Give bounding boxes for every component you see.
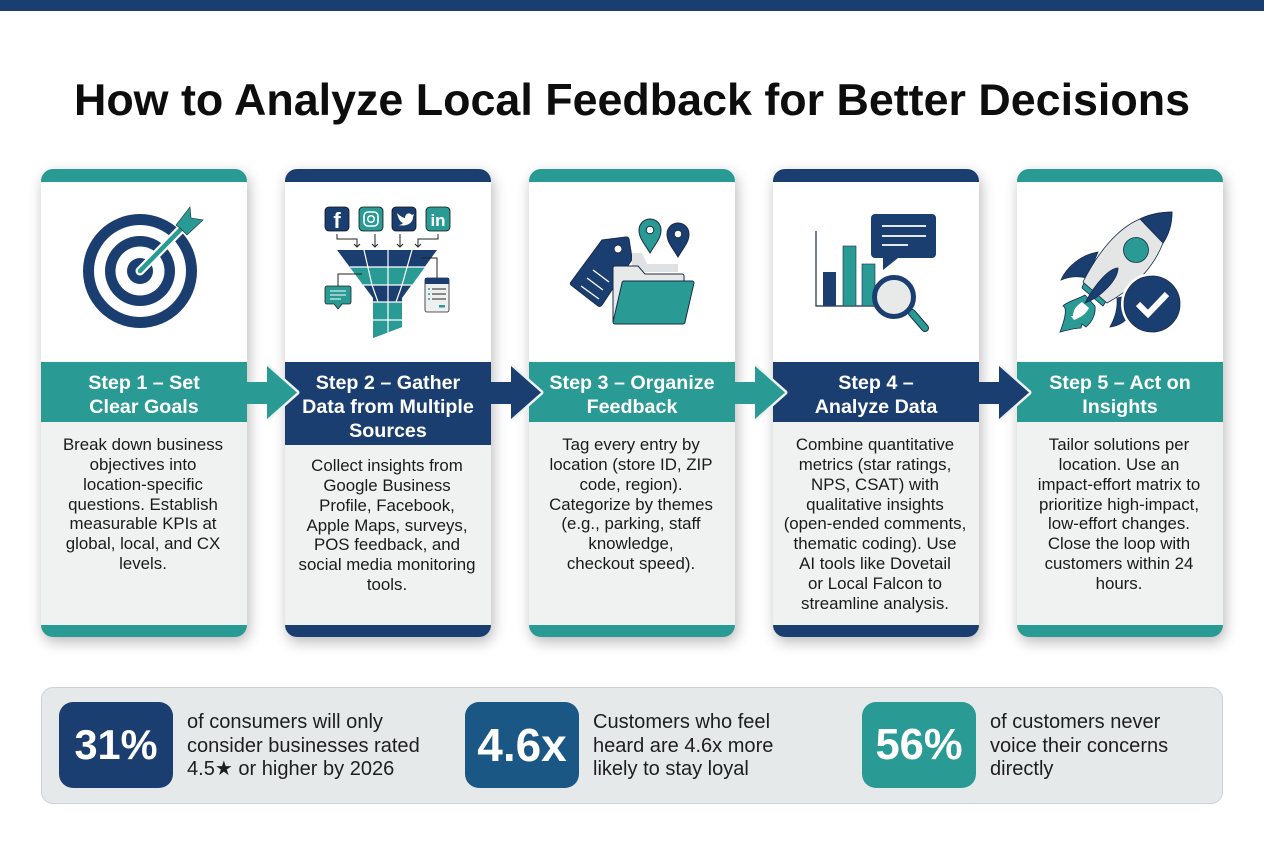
text: step 2: social media monitoring [299,555,475,574]
heading: step 3 [529,362,735,422]
stat text: 31%: of consumers will only [187,711,383,733]
panel: step 5 card [1017,169,1223,637]
heading: step 4 [773,362,979,422]
text: step 4: thematic coding). Use [794,534,956,553]
text: step 3: checkout speed). [567,554,695,573]
text: step 5 [1038,435,1200,593]
stat text: 56%: voice their concerns [990,734,1168,756]
heading: step 4: Step 4 – [838,372,914,394]
panel: step 2 card [285,169,491,637]
text: step 4: or Local Falcon to [808,574,942,593]
icon: target with arrow [83,207,203,328]
text: step 5: prioritize high-impact, [1039,495,1199,514]
arrow: step 3 to 4 [732,366,785,419]
text: step 4: qualitative insights [806,495,944,514]
panel: step 4 card [773,169,979,637]
stat text: 4.6x: Customers who feel [593,711,770,733]
text: step 5: impact-effort matrix to [1038,475,1200,494]
text: step 3: Tag every entry by [562,435,700,454]
arrow: step 1 to 2 [244,366,297,419]
icon: funnel with data sources: f [333,208,341,233]
text: step 5: low-effort changes. [1048,514,1190,533]
heading: step 5: Step 5 – Act on [1049,372,1191,394]
text: step 2: POS feedback, and [314,535,460,554]
stat text: 31%: 4.5★ or higher by 2026 [187,758,394,780]
heading: step 2: Data from Multiple [302,396,474,418]
panel: step 1 card [41,169,247,637]
text: step 2: Profile, Facebook, [319,496,455,515]
stat text: 56%: of customers never [990,711,1160,733]
text: step 1: location-specific [83,475,203,494]
stat: 56% [862,702,976,788]
text: step 2 [299,456,475,594]
text: step 2: Google Business [323,476,451,495]
panel: step 3 card [529,169,735,637]
stat text: 31% [187,711,420,780]
text: step 2: Collect insights from [311,456,463,475]
heading: step 3: Step 3 – Organize [549,372,715,394]
text: step 5: customers within 24 [1045,554,1193,573]
stat: 31% [59,702,173,788]
text: step 3: code, region). [580,475,682,494]
text: step 5: hours. [1096,574,1142,593]
text: step 1: measurable KPIs at [70,514,216,533]
heading: step 1: Step 1 – Set [88,372,200,394]
text: step 1: levels. [119,554,167,573]
text: step 4: AI tools like Dovetail [799,554,951,573]
stat text: 31%: consider businesses rated [187,734,420,756]
icon: rocket with check badge [1060,212,1183,335]
icon: funnel with data sources [325,207,450,338]
text: step 4 [784,435,966,613]
panel: statistics strip [41,687,1223,804]
text: step 2: Apple Maps, surveys, [306,516,468,535]
text: step 4: NPS, CSAT) with [811,475,939,494]
text: step 5: Tailor solutions per [1049,435,1189,454]
top bar [0,0,1264,11]
heading: step 3: Feedback [587,396,677,418]
text: step 3: (e.g., parking, staff [561,514,701,533]
icon: chart, chat bubble and magnifier [816,214,936,328]
text: step 3: location (store ID, ZIP [550,455,712,474]
text: step 4: Combine quantitative [796,435,954,454]
text: step 3: Categorize by themes [549,495,713,514]
stat: 4.6x [465,702,579,788]
stat text: 4.6x: likely to stay loyal [593,758,749,780]
title: How to Analyze Local Feedback for Better Decisions [74,75,1190,125]
text: step 1: questions. Establish [68,495,218,514]
arrow: step 4 to 5 [976,366,1029,419]
arrow: step 2 to 3 [488,366,541,419]
stat text: 4.6x: heard are 4.6x more [593,734,773,756]
text: step 4: metrics (star ratings, [799,455,951,474]
stat text: 56%: directly [990,758,1053,780]
stat: 4.6x: 4.6x [477,719,567,771]
text: step 1: objectives into [90,455,196,474]
heading: step 5 [1017,362,1223,422]
text: step 3: knowledge, [588,534,674,553]
text: step 3 [549,435,713,573]
stat text: 56% [990,711,1168,780]
text: step 4: (open-ended comments, [784,514,966,533]
heading: step 1 [41,362,247,422]
stat text: 4.6x [593,711,773,780]
heading: step 4: Analyze Data [815,396,937,418]
text: step 4: streamline analysis. [801,594,949,613]
heading: step 2: Step 2 – Gather [316,372,460,394]
icon: funnel with data sources: in [430,211,446,230]
heading: step 1: Clear Goals [89,396,199,418]
text: step 5: location. Use an [1059,455,1179,474]
text: step 1: Break down business [63,435,223,454]
text: step 1: global, local, and CX [66,534,220,553]
text: step 5: Close the loop with [1048,534,1190,553]
stat: 31%: 31% [74,721,158,768]
stat: 56%: 56% [875,721,963,769]
text: step 2: tools. [367,575,407,594]
text: step 1 [63,435,223,573]
heading: step 2 [285,362,491,445]
heading: step 5: Insights [1082,396,1158,418]
heading: step 2: Sources [349,420,427,442]
icon: tag, pins and folder [570,219,694,324]
